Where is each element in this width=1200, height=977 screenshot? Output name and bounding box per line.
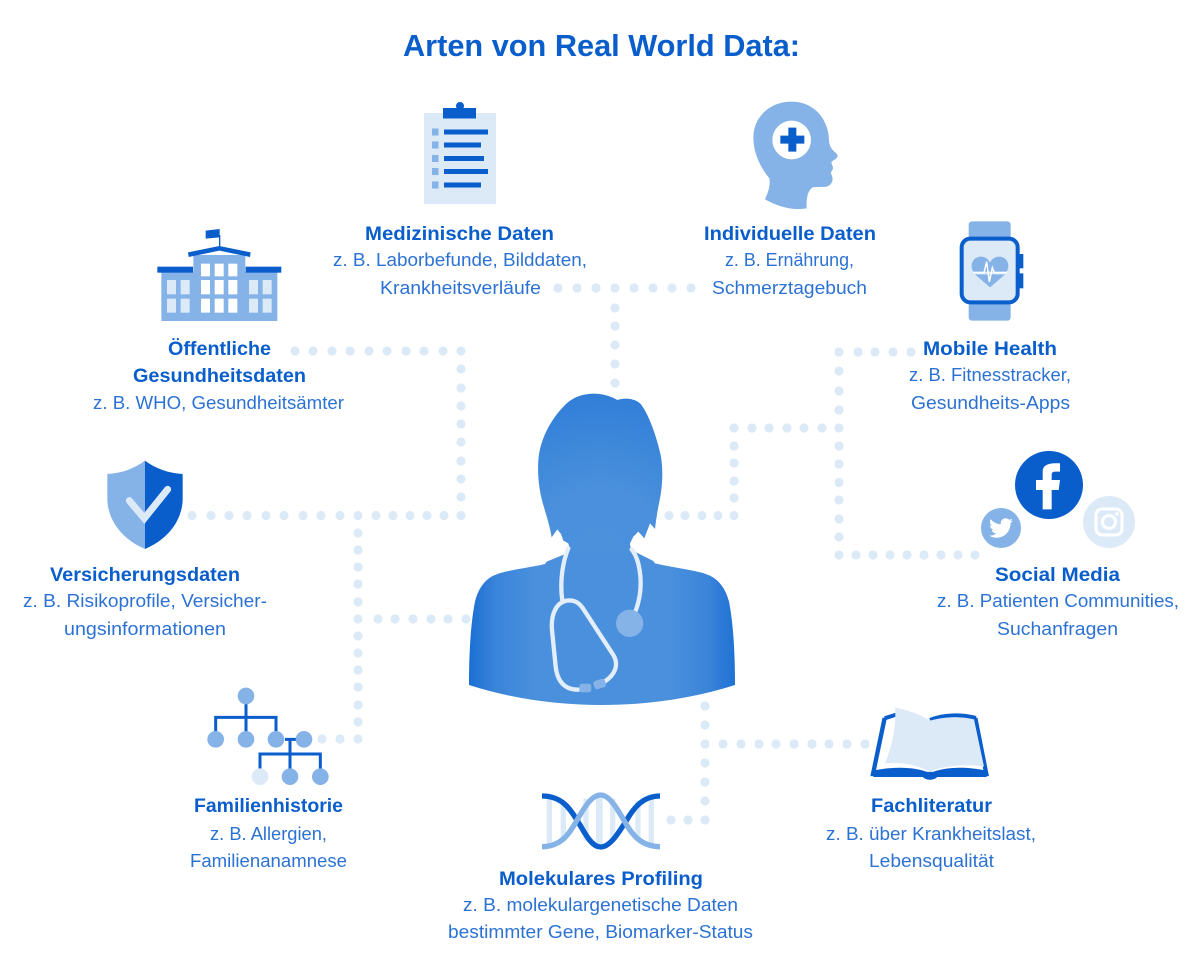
icon: Twitter [981,508,1021,548]
title: Arten von Real World Data: [403,28,800,63]
icon: public health building [157,229,281,321]
text block: Medizinische Daten [333,223,587,298]
text block: Medizinische Daten: z. B. Laborbefunde, Bilddaten, [333,249,587,270]
text block: Versicherungsdaten: Versicherungsdaten [50,564,240,586]
dotted connector: Fachliteratur and Molekulares Profiling [666,701,870,825]
text block: Fachliteratur: Lebensqualität [869,850,994,871]
text block: Versicherungsdaten: ungsinformationen [64,618,226,639]
dotted connector: Mobile Health and Social Media [664,347,980,560]
text block: Familienhistorie [190,795,347,871]
text block: Familienhistorie: Familienanamnese [190,850,347,871]
text block: Mobile Health: Mobile Health [923,338,1057,360]
text block: Öffentliche Gesundheitsdaten [93,337,344,413]
text block: Medizinische Daten: Medizinische Daten [365,223,554,245]
text block: Social Media: Suchanfragen [997,618,1118,639]
dotted connector: Öffentliche Gesundheitsdaten [290,346,466,520]
text block: Versicherungsdaten [23,564,267,639]
text block: Familienhistorie: z. B. Allergien, [210,823,327,844]
text block: Social Media [937,564,1179,639]
text block: Molekulares Profiling: Molekulares Profiling [499,868,703,890]
text block: Fachliteratur: z. B. über Krankheitslast, [826,823,1036,844]
text block: Individuelle Daten [704,223,876,298]
icon: open book [873,707,987,780]
text block: Öffentliche Gesundheitsdaten: Gesundheitsdaten [133,365,306,387]
dotted connector: Versicherungsdaten row [187,511,449,520]
text block: Social Media: z. B. Patienten Communities, [937,590,1179,611]
text block: Social Media: Social Media [995,564,1120,586]
text block: Fachliteratur [826,795,1036,871]
icon: shield with check [107,461,183,549]
text block: Mobile Health: z. B. Fitnesstracker, [909,364,1071,385]
dotted connector: Familienhistorie column [317,528,471,744]
central figure: doctor silhouette with stethoscope [469,394,735,705]
text block: Öffentliche Gesundheitsdaten: Öffentliche [168,337,271,360]
text block: Individuelle Daten: z. B. Ernährung, [725,249,854,270]
text block: Mobile Health [909,338,1071,413]
text block: Medizinische Daten: Krankheitsverläufe [380,277,541,298]
icon: clipboard [424,102,496,204]
text block: Öffentliche Gesundheitsdaten: z. B. WHO, Gesundheitsämter [93,392,344,413]
icon: family tree [207,688,329,785]
text block: Fachliteratur: Fachliteratur [871,795,992,817]
icon: smartwatch with heart [962,221,1023,321]
text block: Molekulares Profiling: bestimmter Gene, Biomarker-Status [448,921,753,942]
dotted connector: Medizinische and Individuelle Daten to centre [553,283,696,388]
text block: Versicherungsdaten: z. B. Risikoprofile, Versicher- [23,590,267,611]
text block: Mobile Health: Gesundheits-Apps [911,392,1070,413]
icon: DNA helix [542,795,660,847]
text block: Molekulares Profiling: z. B. molekulargenetische Daten [463,894,738,915]
icon: Facebook [1015,451,1083,519]
text block: Individuelle Daten: Individuelle Daten [704,223,876,245]
icon: head with medical cross [753,102,838,209]
icon: Instagram [1083,496,1135,548]
text block: Familienhistorie: Familienhistorie [194,795,343,817]
text block: Molekulares Profiling [448,868,753,942]
text block: Individuelle Daten: Schmerztagebuch [712,277,867,298]
